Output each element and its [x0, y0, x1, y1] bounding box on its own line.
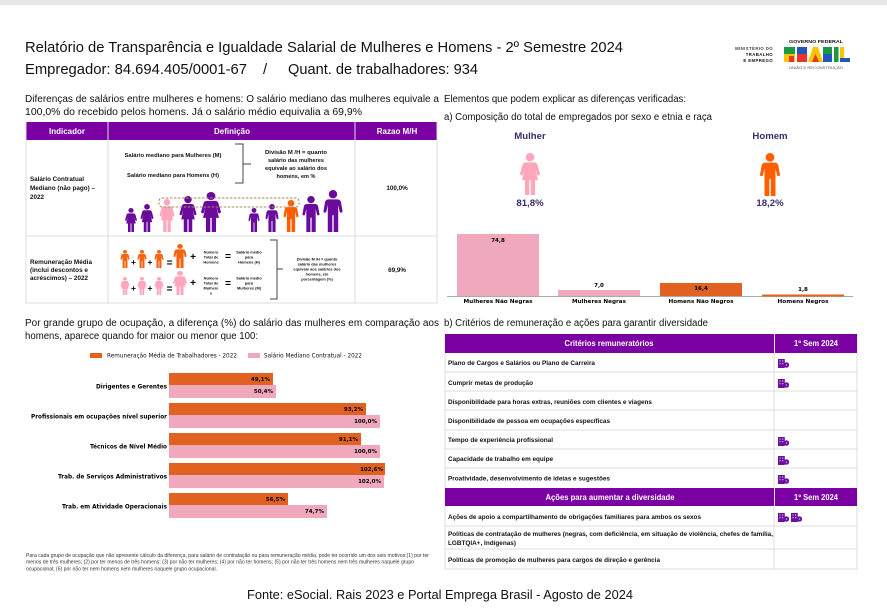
table header [26, 122, 437, 140]
title: Empregador: 84.694.405/0001-67 [25, 61, 247, 78]
criteria rows: Tempo de experiência profissional [448, 438, 553, 444]
row 2 formula: homens: para [245, 254, 254, 260]
row 2 formula: homens: + [131, 257, 136, 267]
panel: homem [752, 131, 788, 209]
group: profissionais [31, 403, 380, 428]
bar chart: composição por sexo e raça: 74,8 [491, 238, 505, 244]
criteria rows: Capacidade de trabalho em equipe [448, 457, 554, 463]
company icons [778, 359, 789, 484]
text: grande grupo de ocupação: Por grande grupo de ocupação, a diferença (%) do salário das mulheres em comparação aos [25, 318, 439, 329]
text: elementos explicativos: a) Composição do total de empregados por sexo e etnia e raça [444, 112, 712, 123]
action rows: Ações de apoio a compartilhamento de obrigações familiares para ambos os sexos [448, 515, 702, 521]
row 2 formula: homens: Número [204, 250, 219, 254]
logo: ministério e governo federal: TRABALHO [746, 52, 773, 57]
legend [90, 352, 362, 360]
footnote: menos de três mulheres; (2) por ter menos de três homens; (3) por não ter mulheres; (4) por não ter homens; (5) por não ter três homens nem três mulheres naquele grupo [26, 560, 414, 566]
text: elementos explicativos [444, 94, 712, 123]
row 2 formula: homens: Salário médio [236, 250, 262, 254]
bar chart: composição por sexo e raça: Mulheres Não Negras [464, 299, 533, 305]
title [25, 39, 623, 78]
header: ações: 1º Sem 2024 [794, 493, 839, 502]
logo: ministério e governo federal: UNIÃO E RECONSTRUÇÃO [789, 65, 843, 70]
row 2 bracket and division note: Divisão M /H = quanto [297, 256, 338, 262]
row 2 formula: mulheres: Número [204, 276, 219, 280]
table header: Razao M/H [377, 127, 417, 136]
row 1 definition formula: homens, em % [276, 174, 316, 180]
panel: tabela de indicadores [26, 122, 437, 303]
bar chart: composição por sexo e raça: 7,0 [594, 283, 604, 289]
footnote: Para cada grupo de ocupação que não apresente cálculo da diferença, para salário de contratação ou para remuneração média, pode ter ocorrido um dos seis motivos:(1) por ter [26, 553, 429, 559]
logo: ministério e governo federal: GOVERNO FEDERAL [789, 39, 843, 45]
bar chart: composição por sexo e raça: 1,8 [798, 287, 808, 293]
row 2 formula: mulheres: Mulheres (M) [237, 286, 262, 290]
group: técnicos: Técnicos de Nível Médio [90, 442, 167, 450]
row 2 formula: mulheres: para [245, 280, 254, 286]
text: grande grupo de ocupação: homens, aparece quando for maior ou menor que 100: [25, 331, 258, 342]
row 2 formula: homens: = [167, 258, 173, 269]
row 2 formula: mulheres: Salário médio [236, 276, 262, 280]
criteria rows [448, 361, 653, 482]
row 2 formula: homens: + [148, 257, 153, 267]
bar chart: composição por sexo e raça [447, 234, 853, 305]
bar chart: composição por sexo e raça: Homens Não Negros [668, 299, 734, 305]
table header: Definição [214, 127, 250, 136]
title: Relatório de Transparência e Igualdade Salarial de Mulheres e Homens - 2º Semestre 2024 [25, 39, 623, 56]
row 1 indicator [30, 176, 95, 201]
row 2 formula: mulheres: + [190, 278, 196, 289]
row 2 bracket and division note: equivale aos salários dos [293, 266, 341, 272]
header: ações [445, 488, 857, 506]
bar chart: composição por sexo e raça: Mulheres Negras [572, 299, 627, 305]
row 2 bracket and division note: salário das mulheres [298, 262, 336, 266]
header: critérios remuneratórios [445, 334, 857, 353]
group: operacionais: 56,5% [266, 497, 285, 503]
bar chart: composição por sexo e raça: 16,4 [694, 286, 708, 292]
row 2 formula: mulheres: = [167, 284, 173, 295]
grid [445, 334, 857, 569]
footnote [26, 553, 429, 572]
row 1 definition formula: Divisão M /H = quanto [265, 150, 328, 156]
bar chart: composição por sexo e raça: Homens Negros [778, 299, 829, 305]
action rows: Políticas de promoção de mulheres para cargos de direção e gerência [448, 558, 661, 564]
group: operacionais: 74,7% [305, 509, 324, 515]
row 2 indicator: Remuneração Média [30, 259, 92, 266]
row 1 indicator: Mediano (não pago) – [30, 185, 95, 192]
legend: Salário Mediano Contratual - 2022 [264, 352, 362, 360]
group: profissionais: 100,0% [354, 419, 377, 425]
row 2 value: 69,9% [388, 267, 406, 274]
row 2 formula: mulheres: Total de [204, 280, 219, 286]
row 2 bracket and division note [270, 240, 341, 299]
group: dirigentes [96, 373, 276, 398]
source footer: Fonte: eSocial. Rais 2023 e Portal Emprega Brasil - Agosto de 2024 [247, 587, 633, 602]
criteria rows: Cumprir metas de produção [448, 381, 533, 387]
row 2 indicator: acréscimos) – 2022 [30, 275, 88, 282]
text: diferenças de salários [25, 94, 439, 118]
table header: Indicador [49, 127, 85, 136]
letters BRASIL as colour blocks [784, 47, 795, 54]
header: critérios remuneratórios: Critérios remuneratórios [564, 339, 654, 348]
row 2 formula: mulheres: = [225, 278, 231, 290]
row 2 indicator [30, 259, 92, 282]
group: operacionais [62, 493, 327, 518]
row 1 definition formula [124, 144, 328, 183]
panel: homem: 18,2% [756, 198, 784, 209]
row 2 formula: homens [120, 244, 262, 269]
legend: Remuneração Média de Trabalhadores - 2022 [107, 352, 237, 360]
group: administrativos: Trab. de Serviços Administrativos [58, 472, 167, 480]
action rows [448, 515, 773, 564]
panel: homem: Homem [752, 131, 788, 142]
group: dirigentes: 49,1% [251, 377, 270, 383]
row 2 formula: homens: Total de [204, 254, 219, 260]
row 2 formula: mulheres: s [210, 290, 212, 296]
panel: mulher: 81,8% [516, 198, 544, 209]
logo: ministério e governo federal: MINISTÉRIO DO [735, 46, 773, 51]
criteria rows: Disponibilidade de pessoa em ocupações específicas [448, 419, 611, 425]
title: Quant. de trabalhadores: 934 [288, 61, 478, 78]
row 2 formula: homens: Homens [203, 260, 219, 264]
icons: mulheres mediana [125, 192, 221, 232]
row 2 formula: homens: Homens (H) [238, 260, 261, 264]
row 2 formula: homens: = [225, 252, 231, 262]
panel: mulher: Mulher [514, 131, 546, 142]
criteria rows: Disponibilidade para horas extras, reuniões com clientes e viagens [448, 400, 653, 406]
row 1 definition formula: Salário mediano para Mulheres (M) [124, 153, 222, 159]
row 1 indicator: Salário Contratual [30, 176, 84, 183]
group: técnicos: 91,1% [339, 437, 358, 443]
criteria rows: Proatividade, desenvolvimento de ideias e sugestões [448, 476, 611, 482]
text: elementos explicativos: Elementos que podem explicar as diferenças verificadas: [444, 94, 686, 105]
icons: homens mediana [248, 190, 343, 232]
group: dirigentes: 50,4% [254, 389, 273, 395]
row 2 formula: homens: + [190, 252, 196, 263]
row 2 formula: mulheres [121, 271, 262, 296]
text: critérios heading: b) Critérios de remuneração e ações para garantir diversidade [444, 318, 708, 329]
group: dirigentes: Dirigentes e Gerentes [96, 382, 167, 390]
action rows: LGBTQIA+, Indígenas) [448, 541, 516, 547]
group: administrativos: 102,0% [358, 479, 381, 485]
header: critérios remuneratórios: 1º Sem 2024 [794, 339, 839, 348]
row 2 formula: mulheres: + [131, 283, 136, 293]
logo: ministério e governo federal: E EMPREGO [743, 58, 773, 63]
top strip [0, 0, 887, 5]
group: profissionais: 93,2% [344, 407, 363, 413]
text: diferenças de salários: Diferenças de salários entre mulheres e homens: O salário mediano das mulheres equivale a [25, 94, 439, 105]
text: grande grupo de ocupação [25, 318, 439, 342]
dashed highlight [159, 198, 299, 207]
panel: mulher [514, 131, 546, 209]
group: operacionais: Trab. em Atividade Operacionais [62, 502, 167, 510]
criteria rows: Plano de Cargos e Salários ou Plano de Carreira [448, 361, 596, 367]
panel: tabela de critérios [445, 334, 857, 569]
header: ações: Ações para aumentar a diversidade [546, 493, 675, 502]
row 2 bracket and division note: homens, em [306, 272, 329, 276]
row 1 definition formula: equivale ao salário dos [265, 166, 327, 172]
group: administrativos: 102,6% [360, 467, 383, 473]
row 1 indicator: 2022 [30, 194, 45, 201]
group: administrativos [58, 463, 385, 488]
row 2 formula: mulheres: + [148, 283, 153, 293]
title: / [263, 61, 268, 78]
row 1 definition formula: Salário mediano para Homens (H) [127, 173, 219, 179]
row 1 definition formula: salário das mulheres [268, 158, 324, 164]
group: técnicos [90, 433, 380, 458]
row 2 formula: mulheres: Mulhere [204, 286, 219, 290]
footnote: ocupacional; (6) por não ter nem homens nem mulheres naquele grupo ocupacional. [26, 566, 217, 572]
table grid [26, 122, 437, 303]
text: diferenças de salários: 100,0% do recebido pelos homens. Já o salário médio equivalia a 69,9% [25, 107, 362, 118]
action rows: Políticas de contratação de mulheres (negras, com deficiência, em situação de violência, chefes de família, [448, 532, 773, 538]
group: profissionais: Profissionais em ocupações nível superior [31, 412, 168, 420]
company icons: ações [778, 513, 802, 522]
group: técnicos: 100,0% [354, 449, 377, 455]
logo: ministério e governo federal [735, 39, 850, 70]
bar chart: ocupações [31, 373, 385, 518]
row 2 bracket and division note: porcentagem (%) [301, 276, 333, 282]
row 2 indicator: (inclui descontos e [30, 267, 88, 274]
row 1 value: 100,0% [386, 185, 408, 192]
